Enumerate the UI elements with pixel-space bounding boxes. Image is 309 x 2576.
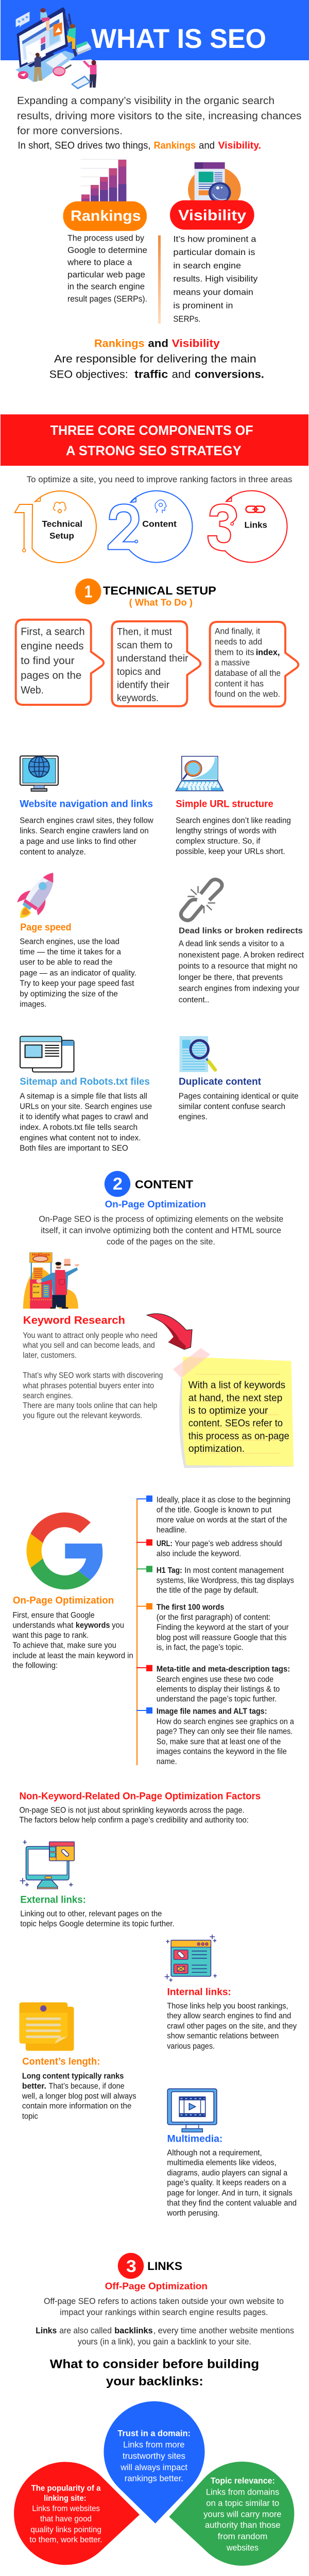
component 3: links bbox=[208, 490, 287, 562]
teardrop: topic relevance: Links from domains bbox=[206, 2487, 279, 2497]
callout: find pages: Web. bbox=[21, 685, 44, 696]
heading and text: duplicate content: similar content confuse search bbox=[179, 1102, 285, 1111]
callout: scan pages: keywords. bbox=[117, 693, 159, 704]
heading and text: content length: well, a longer blog post will always bbox=[22, 2092, 136, 2100]
sticky note text: With a list of keywords bbox=[188, 1379, 285, 1391]
heading and text: on-page optimization: On-Page Optimization bbox=[13, 1596, 114, 1606]
visibility description: means your domain bbox=[173, 287, 253, 297]
panel: rankings bbox=[63, 201, 147, 304]
rankings and visibility conclusion bbox=[49, 337, 264, 380]
icon: yellow documents bbox=[19, 2003, 74, 2051]
heading and text: multimedia: that they find the content valuable and bbox=[167, 2199, 297, 2208]
heading and text: dead links: points to a resource that might no bbox=[179, 962, 298, 971]
heading: links: Off-Page Optimization bbox=[105, 2280, 208, 2291]
icon: visibility window and magnifier bbox=[188, 162, 241, 213]
heading and text: keyword research: There are many tools online that can help bbox=[23, 1401, 157, 1410]
teardrop: popularity of a linking site bbox=[14, 2462, 140, 2565]
heading and text: page speed bbox=[20, 922, 136, 1009]
intro paragraph: Expanding a company’s visibility in the organic search bbox=[17, 95, 274, 107]
callout: find pages: pages on the bbox=[21, 670, 81, 681]
text: off-page SEO definition: Links bbox=[36, 2326, 57, 2335]
sticky note text bbox=[188, 1379, 289, 1454]
icon: rankings bar chart bbox=[81, 159, 126, 202]
list: keyword placement bbox=[157, 1496, 294, 1766]
text: off-page SEO definition: , every time another website mentions bbox=[153, 2326, 294, 2335]
heading: content: CONTENT bbox=[135, 1178, 193, 1191]
heading and text: page speed: images. bbox=[20, 1000, 46, 1009]
rankings and visibility conclusion: conversions. bbox=[195, 368, 264, 380]
rankings and visibility conclusion: Are responsible for delivering the main bbox=[54, 353, 256, 365]
list: keyword placement: (or the first paragraph) of content: bbox=[157, 1613, 270, 1622]
sticky note text: optimization. bbox=[188, 1443, 245, 1454]
heading: technical setup bbox=[75, 579, 216, 608]
illustration: people building a website bbox=[15, 7, 96, 89]
heading and text: on-page optimization: keywords bbox=[76, 1621, 110, 1630]
text: on-page SEO definition: code of the pages on the site. bbox=[107, 1237, 215, 1247]
heading and text: website navigation: links. Search engine crawlers land on bbox=[20, 826, 149, 835]
heading and text: non-keyword factors bbox=[20, 1790, 261, 1825]
heading and text: on-page optimization: the following: bbox=[12, 1661, 58, 1670]
callout: add to index: content it has bbox=[215, 679, 264, 688]
sticky note bbox=[173, 1348, 294, 1468]
rankings description bbox=[67, 233, 147, 304]
teardrop: popularity of a linking site: The popularity of a bbox=[31, 2484, 101, 2493]
heading and text: internal links: Internal links: bbox=[167, 1987, 231, 1998]
list: keyword placement: name. bbox=[157, 1757, 177, 1766]
list: keyword placement: Ideally, place it as close to the beginning bbox=[157, 1496, 290, 1504]
icon: broken chain link bbox=[181, 879, 222, 920]
heading and text: simple URL structure: complex structure. So, if bbox=[176, 837, 261, 845]
heading and text: multimedia: Multimedia: bbox=[167, 2133, 222, 2144]
component 2: content bbox=[108, 491, 192, 563]
rankings and visibility conclusion: Visibility bbox=[172, 337, 220, 349]
icon: rocket bbox=[17, 873, 53, 918]
heading and text: keyword research: You want to attract only people who need bbox=[23, 1331, 158, 1340]
callout: scan pages: Then, it must bbox=[117, 626, 172, 637]
text: on-page SEO definition bbox=[39, 1214, 283, 1247]
teardrop: topic relevance: from random bbox=[218, 2532, 267, 2541]
component 2: content: Content bbox=[142, 520, 177, 529]
heading and text: sitemap: Both files are important to SEO bbox=[20, 1144, 128, 1153]
panel: visibility: Visibility bbox=[178, 208, 246, 224]
heading and text: multimedia: diagrams, audio players can signal a bbox=[167, 2168, 287, 2177]
banner: three core components: A STRONG SEO STRATEGY bbox=[66, 443, 242, 458]
visibility pill bbox=[170, 200, 254, 230]
component 1: technical setup: Setup bbox=[49, 532, 74, 541]
teardrop: popularity of a linking site: linking site: bbox=[44, 2494, 87, 2503]
rankings and visibility conclusion: and bbox=[172, 368, 191, 380]
list: keyword placement: is, in fact, the page’s topic. bbox=[157, 1643, 244, 1652]
intro paragraph: for more conversions. bbox=[17, 125, 123, 137]
callout: add to index: index, bbox=[256, 647, 280, 657]
visibility description: particular domain is bbox=[173, 247, 255, 257]
icon: cloud gear bbox=[54, 502, 66, 513]
heading and text: page speed: by optimizing the size of the bbox=[20, 990, 118, 998]
list: keyword placement: of the title. Google is known to put bbox=[157, 1506, 272, 1515]
component 1: technical setup bbox=[15, 491, 96, 563]
heading and text: sitemap: it to identify what pages to crawl and bbox=[20, 1112, 148, 1121]
list: keyword placement: blog post will reassure Google that this bbox=[157, 1633, 287, 1642]
list: keyword placement: the title of the page by default. bbox=[157, 1586, 259, 1595]
heading and text: page speed: time — the time it takes for a bbox=[20, 948, 121, 957]
list: keyword placement: H1 Tag: bbox=[157, 1566, 182, 1575]
intro paragraph bbox=[17, 95, 301, 137]
icon: hot dog stand vendor bbox=[23, 1252, 80, 1309]
heading and text: non-keyword factors: On-page SEO is not just about sprinkling keywords across the page. bbox=[20, 1806, 244, 1815]
heading and text: keyword research: Keyword Research bbox=[23, 1314, 125, 1326]
rankings description: particular web page bbox=[67, 269, 145, 279]
rankings pill bbox=[63, 201, 147, 231]
callout: add to index: found on the web. bbox=[215, 689, 280, 699]
heading and text: keyword research: search engines. bbox=[23, 1392, 73, 1400]
heading and text: non-keyword factors: The factors below help confirm a page’s credibility and authority too: bbox=[20, 1816, 249, 1825]
heading: links: 3 bbox=[126, 2257, 136, 2276]
list: keyword placement: The first 100 words bbox=[157, 1603, 224, 1612]
teardrop: trust in a domain bbox=[104, 2401, 205, 2523]
list: keyword placement: headline. bbox=[157, 1526, 187, 1534]
callout: find pages bbox=[16, 620, 104, 705]
short summary line: In short, SEO drives two things, bbox=[18, 140, 150, 151]
visibility description: is prominent in bbox=[173, 300, 233, 310]
heading and text: website navigation: Search engines crawl sites, they follow bbox=[20, 816, 153, 825]
heading and text: on-page optimization bbox=[12, 1596, 133, 1670]
icon: hot dog stand vendor: $1.00 bbox=[33, 1285, 40, 1287]
callout: scan pages: topics and bbox=[117, 667, 161, 677]
intro paragraph: results, driving more visitors to the site, increasing chances bbox=[17, 110, 301, 122]
teardrop: topic relevance: websites bbox=[226, 2544, 259, 2553]
icon: chain bbox=[246, 506, 265, 512]
list: keyword placement: So, make sure that at least one of the bbox=[157, 1737, 281, 1746]
icon: internal links window bbox=[165, 1935, 217, 1982]
component 1: technical setup: Technical bbox=[42, 520, 82, 529]
heading and text: sitemap: A sitemap is a simple file that lists all bbox=[20, 1092, 147, 1100]
teardrop: popularity of a linking site: quality links pointing bbox=[30, 2526, 101, 2534]
callout: add to index: them to its bbox=[215, 647, 254, 657]
text: on-page SEO definition: itself, it can involve optimizing both the content and HTML source bbox=[41, 1225, 281, 1235]
icon: Google G logo bbox=[26, 1513, 102, 1589]
visibility description: in search engine bbox=[173, 261, 241, 270]
rankings description: result pages (SERPs). bbox=[67, 294, 147, 304]
short summary line: Visibility. bbox=[218, 140, 261, 151]
teardrop: topic relevance: on a topic similar to bbox=[206, 2499, 279, 2508]
list: keyword placement: URL: bbox=[157, 1539, 173, 1548]
heading and text: multimedia: multimedia elements like videos, bbox=[167, 2159, 277, 2167]
heading and text: website navigation bbox=[20, 799, 153, 856]
callout: find pages: to find your bbox=[21, 655, 75, 667]
heading and text: keyword research: That’s why SEO work starts with discovering bbox=[23, 1371, 163, 1380]
heading and text: internal links bbox=[167, 1987, 297, 2051]
rankings description: in the search engine bbox=[67, 282, 145, 292]
callout: add to index: And finally, it bbox=[215, 626, 260, 636]
heading and text: sitemap bbox=[20, 1077, 152, 1153]
text: off-page SEO definition bbox=[36, 2297, 294, 2347]
icon: hot dog stand vendor: HotDogs bbox=[32, 1252, 50, 1257]
gradient divider bbox=[158, 235, 161, 324]
teardrop: trust in a domain: Links from more bbox=[123, 2441, 184, 2450]
callout: scan pages bbox=[112, 621, 200, 706]
rankings description: where to place a bbox=[67, 258, 132, 267]
list: keyword placement: understand the page’s topic further. bbox=[157, 1695, 277, 1704]
icon: monitor with globe bbox=[20, 756, 58, 791]
list: keyword placement: systems, like Wordpress, this tag displays bbox=[157, 1577, 294, 1585]
short summary line bbox=[18, 140, 261, 151]
heading and text: content length: That’s because, if done bbox=[48, 2082, 125, 2091]
heading and text: page speed: Page speed bbox=[20, 922, 71, 933]
heading and text: content length: Content’s length: bbox=[22, 2057, 100, 2067]
heading and text: sitemap: URLs on your site. Search engines use bbox=[20, 1102, 152, 1111]
heading and text: keyword research: you figure out the relevant keywords. bbox=[23, 1412, 142, 1420]
heading: content: On-Page Optimization bbox=[105, 1198, 206, 1209]
teardrop: trust in a domain: Trust in a domain: bbox=[117, 2429, 191, 2438]
sticky note text: this process as on-page bbox=[188, 1430, 289, 1442]
list: keyword placement: elements to display their listings & to bbox=[157, 1685, 280, 1693]
heading and text: internal links: Those links help you boost rankings, bbox=[167, 2002, 288, 2010]
heading and text: on-page optimization: To achieve that, make sure you bbox=[12, 1641, 116, 1650]
heading and text: external links: Linking out to other, relevant pages on the bbox=[20, 1910, 162, 1919]
short summary line: Rankings bbox=[153, 140, 196, 151]
heading and text: on-page optimization: want this page to rank. bbox=[12, 1631, 89, 1640]
heading and text: page speed: Search engines, use the load bbox=[20, 938, 119, 946]
heading and text: dead links bbox=[179, 926, 304, 1004]
icon: monitor with link window bbox=[20, 1840, 74, 1889]
rankings description: Google to determine bbox=[67, 245, 147, 255]
heading and text: content length: contain more information on the bbox=[22, 2102, 131, 2111]
heading and text: page speed: page — as an indicator of quality. bbox=[20, 969, 136, 977]
list: keyword placement: Image file names and ALT tags: bbox=[157, 1707, 267, 1716]
list: keyword placement: How do search engines see graphics on a bbox=[157, 1718, 294, 1726]
heading and text: external links: topic helps Google determine its topic further. bbox=[20, 1920, 175, 1928]
heading and text: content length: topic bbox=[22, 2112, 38, 2121]
text: off-page SEO definition: yours (in a link), you gain a backlink to your site. bbox=[78, 2337, 251, 2347]
heading and text: internal links: crawl other pages on the site, and they bbox=[167, 2022, 297, 2030]
callout: add to index bbox=[210, 622, 298, 706]
heading: links bbox=[105, 2253, 208, 2291]
heading and text: sitemap: engines what content not to index. bbox=[20, 1133, 141, 1142]
heading: what to consider bbox=[50, 2358, 259, 2388]
sticky note text: is to optimize your bbox=[188, 1405, 268, 1416]
heading and text: non-keyword factors: Non-Keyword-Related On-Page Optimization Factors bbox=[20, 1790, 261, 1802]
list: keyword placement: Meta-title and meta-description tags: bbox=[157, 1665, 290, 1673]
callout: find pages: engine needs bbox=[21, 641, 84, 652]
list: keyword placement: page? They can only see their file names. bbox=[157, 1727, 293, 1736]
icon: multimedia monitor bbox=[167, 2089, 217, 2132]
heading and text: on-page optimization: First, ensure that Google bbox=[12, 1611, 95, 1620]
heading and text: multimedia bbox=[166, 2133, 297, 2217]
heading: what to consider: your backlinks: bbox=[106, 2375, 203, 2388]
teardrop: topic relevance bbox=[169, 2462, 294, 2566]
heading and text: keyword research bbox=[22, 1314, 163, 1420]
visibility description: SERPs. bbox=[173, 314, 200, 324]
teardrop: topic relevance: authority than those bbox=[205, 2521, 280, 2530]
callout: add to index: a massive bbox=[215, 658, 250, 668]
heading and text: sitemap: index. A robots.txt file tells search bbox=[20, 1123, 138, 1132]
heading and text: on-page optimization: include at least the main keyword in bbox=[12, 1651, 133, 1660]
heading and text: dead links: A dead link sends a visitor to a bbox=[179, 940, 284, 948]
callout: add to index: database of all the bbox=[215, 668, 281, 678]
heading and text: on-page optimization: you bbox=[112, 1621, 124, 1630]
heading and text: on-page optimization: understands what bbox=[12, 1621, 74, 1630]
teardrop: trust in a domain: will always impact bbox=[120, 2463, 187, 2472]
heading and text: internal links: they allow search engines to find and bbox=[167, 2012, 291, 2021]
heading and text: page speed: user to be able to read the bbox=[20, 958, 112, 967]
teardrop: trust in a domain: rankings better. bbox=[125, 2474, 183, 2483]
heading and text: multimedia: worth perusing. bbox=[166, 2209, 219, 2217]
heading and text: dead links: longer be there, that prevents bbox=[179, 973, 283, 982]
heading and text: multimedia: page’s quality. It keeps readers on a bbox=[167, 2179, 286, 2188]
heading and text: simple URL structure: possible, keep your URLs short. bbox=[176, 847, 285, 856]
teardrop: topic relevance: Topic relevance: bbox=[211, 2477, 275, 2486]
heading: technical setup: ( What To Do ) bbox=[129, 597, 193, 608]
list: keyword placement: Your page’s web address should bbox=[175, 1539, 282, 1548]
callout: scan pages: identify their bbox=[117, 680, 170, 691]
icon: laptop with magnifier bbox=[176, 756, 224, 791]
text: off-page SEO definition: backlinks bbox=[114, 2326, 153, 2335]
heading and text: keyword research: later, customers. bbox=[23, 1351, 77, 1360]
list: keyword placement: Search engines use these two code bbox=[157, 1675, 273, 1684]
heading and text: sitemap: Sitemap and Robots.txt files bbox=[20, 1077, 150, 1088]
list: keyword placement: images contains the keyword in the file bbox=[157, 1748, 287, 1756]
heading and text: dead links: Dead links or broken redirects bbox=[179, 926, 303, 935]
heading: content: 2 bbox=[113, 1174, 123, 1193]
title: WHAT IS SEO bbox=[91, 24, 266, 54]
short summary line: and bbox=[199, 140, 215, 151]
heading and text: keyword research: what phrases potential buyers enter into bbox=[22, 1381, 154, 1390]
banner: three core components: THREE CORE COMPONENTS OF bbox=[50, 422, 253, 438]
icon: document with magnifier bbox=[180, 1036, 215, 1072]
heading and text: external links bbox=[20, 1894, 175, 1928]
heading and text: website navigation: a page and use links to find other bbox=[20, 837, 136, 846]
visibility description bbox=[173, 234, 258, 324]
heading: content bbox=[105, 1171, 206, 1209]
callout: find pages: First, a search bbox=[21, 626, 85, 637]
list: keyword placement: Finding the keyword at the start of your bbox=[157, 1623, 289, 1632]
arrow: to sticky note bbox=[147, 1314, 192, 1349]
heading and text: multimedia: Although not a requirement, bbox=[167, 2148, 262, 2157]
heading and text: multimedia: page for longer. And in turn, it signals bbox=[167, 2189, 293, 2197]
heading and text: website navigation: Website navigation and links bbox=[20, 799, 153, 810]
sticky note text: content. SEOs refer to bbox=[188, 1418, 283, 1429]
teardrop: popularity of a linking site: Links from websites bbox=[32, 2504, 100, 2513]
teardrop: popularity of a linking site: to them, work better. bbox=[29, 2535, 102, 2544]
heading and text: page speed: Try to keep your page speed fast bbox=[20, 979, 134, 988]
text: on-page SEO definition: On-Page SEO is the process of optimizing elements on the website bbox=[39, 1214, 283, 1224]
text: off-page SEO definition: Off-page SEO refers to actions taken outside your own website to bbox=[44, 2297, 284, 2306]
banner: three core components bbox=[1, 414, 308, 466]
teardrop: trust in a domain: trustworthy sites bbox=[123, 2452, 185, 2461]
sticky note text: at hand, the next step bbox=[188, 1392, 282, 1403]
heading and text: simple URL structure: lengthy strings of words with bbox=[176, 826, 277, 835]
rankings and visibility conclusion: Rankings bbox=[94, 337, 144, 349]
component 3: links: Links bbox=[244, 520, 267, 530]
heading and text: duplicate content: engines. bbox=[179, 1112, 208, 1121]
icon: head bbox=[155, 500, 166, 513]
heading and text: duplicate content: Duplicate content bbox=[179, 1077, 262, 1088]
heading and text: dead links: nonexistent page. A broken redirect bbox=[179, 951, 304, 959]
icon: hot dog stand vendor: $3.00 bbox=[33, 1291, 40, 1294]
callout: add to index: needs to add bbox=[215, 637, 262, 647]
visibility description: It’s how prominent a bbox=[173, 234, 256, 244]
callout: scan pages: scan them to bbox=[117, 640, 173, 651]
heading: technical setup: TECHNICAL SETUP bbox=[103, 584, 216, 597]
heading and text: keyword research: what you sell and can become leads, and bbox=[22, 1341, 155, 1350]
heading and text: content length: better. bbox=[22, 2082, 46, 2091]
header band bbox=[1, 0, 309, 60]
list: keyword placement: In most content management bbox=[184, 1566, 284, 1575]
text: off-page SEO definition: impact your rankings within search engine results pages. bbox=[60, 2308, 268, 2317]
heading and text: dead links: content.. bbox=[179, 995, 209, 1004]
heading: what to consider: What to consider before building bbox=[50, 2358, 259, 2371]
heading and text: website navigation: content to analyze. bbox=[20, 848, 86, 856]
heading and text: external links: External links: bbox=[20, 1894, 86, 1905]
panel: visibility bbox=[170, 200, 258, 324]
heading and text: duplicate content bbox=[179, 1077, 299, 1121]
heading and text: content length: Long content typically ranks bbox=[22, 2072, 124, 2080]
text: off-page SEO definition: are also called bbox=[59, 2326, 112, 2335]
heading and text: simple URL structure: Search engines don’t like reading bbox=[176, 816, 291, 825]
heading and text: duplicate content: Pages containing identical or quite bbox=[179, 1092, 299, 1100]
callout: scan pages: understand their bbox=[117, 653, 188, 664]
icon: sitemap windows bbox=[20, 1037, 74, 1072]
rankings and visibility conclusion: SEO objectives: bbox=[49, 368, 128, 380]
text: three areas intro: To optimize a site, you need to improve ranking factors in three areas bbox=[27, 475, 292, 484]
panel: rankings: Rankings bbox=[71, 208, 141, 224]
teardrop: topic relevance: yours will carry more bbox=[203, 2510, 281, 2519]
heading: technical setup: 1 bbox=[84, 582, 92, 601]
list: keyword placement: more value on words at the start of the bbox=[157, 1516, 287, 1524]
heading and text: simple URL structure bbox=[176, 799, 291, 856]
heading: links: LINKS bbox=[147, 2260, 182, 2273]
timeline connector with markers bbox=[136, 1496, 152, 1765]
visibility description: results. High visibility bbox=[173, 274, 258, 284]
rankings description: The process used by bbox=[67, 233, 144, 243]
heading and text: internal links: show semantic relations between bbox=[167, 2032, 279, 2041]
rankings and visibility conclusion: and bbox=[148, 337, 168, 349]
rankings and visibility conclusion: traffic bbox=[134, 368, 168, 380]
heading and text: simple URL structure: Simple URL structure bbox=[176, 799, 273, 810]
heading and text: internal links: various pages. bbox=[167, 2042, 215, 2051]
heading and text: content length bbox=[22, 2057, 136, 2121]
teardrop: popularity of a linking site: that have good bbox=[40, 2515, 92, 2523]
heading and text: dead links: search engines from indexing your bbox=[179, 985, 300, 993]
list: keyword placement: also include the keyword. bbox=[157, 1549, 241, 1558]
